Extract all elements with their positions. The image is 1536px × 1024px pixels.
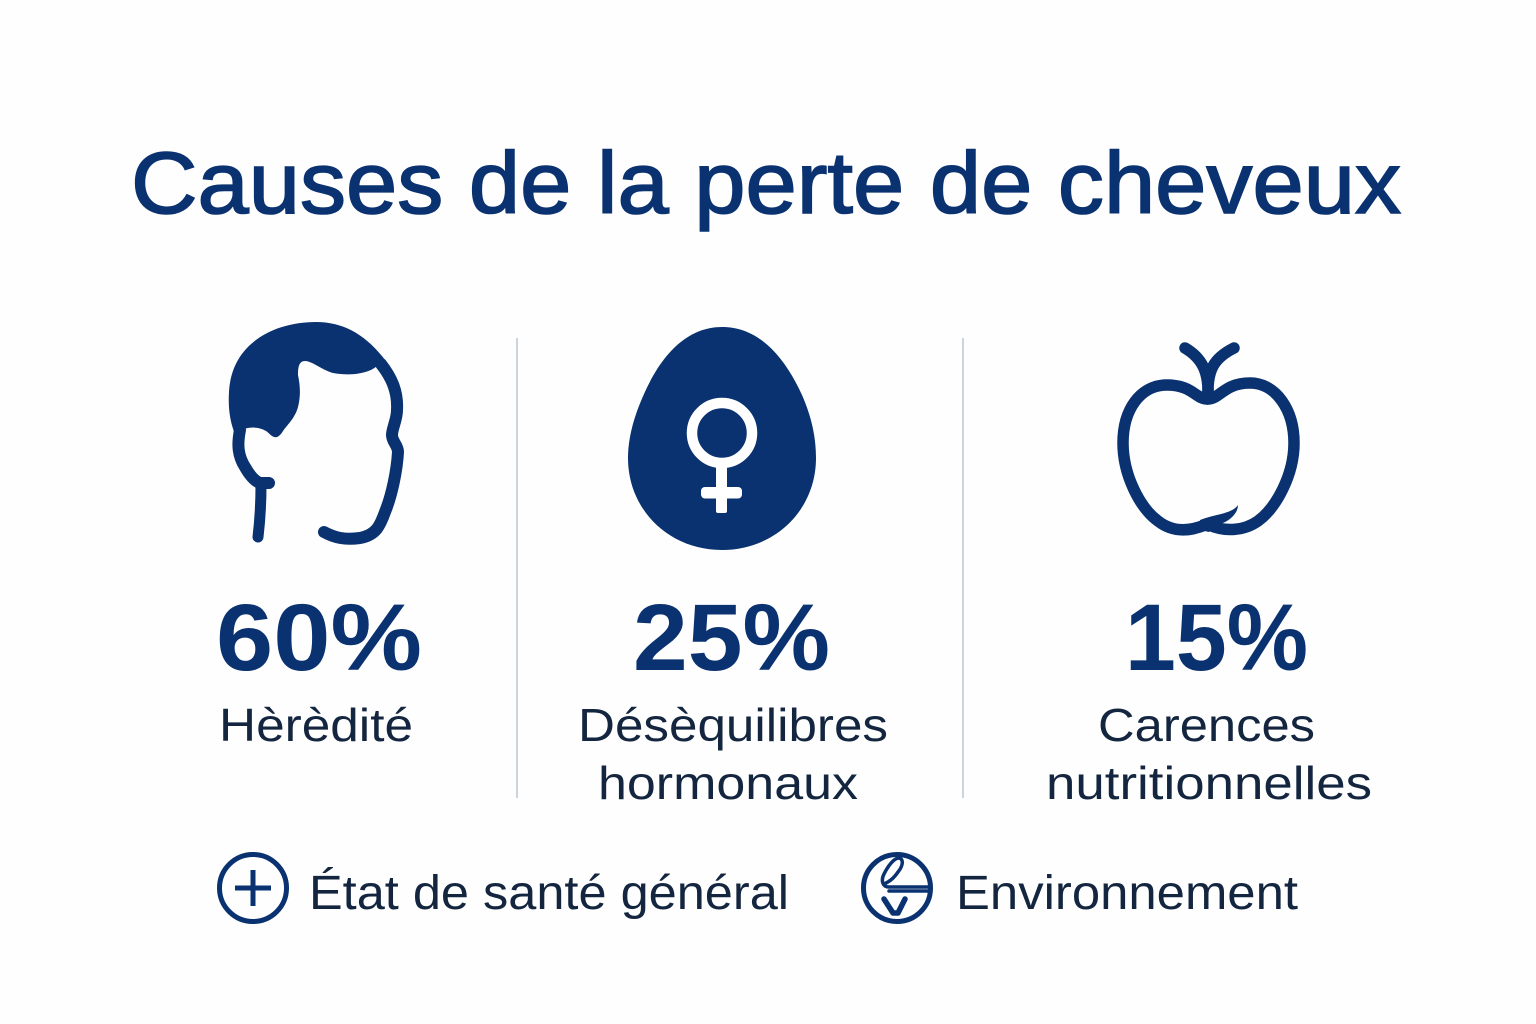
label: general health: État de santé général: [309, 867, 789, 920]
stat: 25%: 25%: [633, 585, 830, 691]
panel: hormonal imbalances: [578, 327, 888, 809]
icon: environment globe: [864, 854, 930, 922]
stat: 60%: 60%: [216, 585, 422, 691]
label: nutritional deficiencies: nutritionnelles: [1046, 757, 1372, 809]
label: hormonal imbalances: Désèquilibres: [578, 699, 888, 751]
footer item: environment: [864, 854, 1298, 922]
icon: apple: [1123, 348, 1294, 532]
panel: heredity: [216, 322, 422, 751]
icon: head with hair: [229, 322, 398, 539]
icon: plus in circle: [220, 854, 286, 922]
stat: 15%: 15%: [1125, 585, 1308, 691]
title: Causes de la perte de cheveux: [131, 135, 1401, 232]
label: nutritional deficiencies: Carences: [1098, 699, 1315, 751]
panel: nutritional deficiencies: [1046, 348, 1372, 809]
apple skin tail: [1200, 505, 1238, 532]
icon: egg with female symbol: [628, 327, 816, 550]
footer item: general health: [220, 854, 789, 922]
label: hormonal imbalances: hormonaux: [598, 757, 858, 809]
label: nutritional deficiencies: [1046, 699, 1372, 809]
label: heredity: Hèrèdité: [219, 699, 413, 751]
label: hormonal imbalances: [578, 699, 888, 809]
label: environment: Environnement: [956, 867, 1298, 920]
